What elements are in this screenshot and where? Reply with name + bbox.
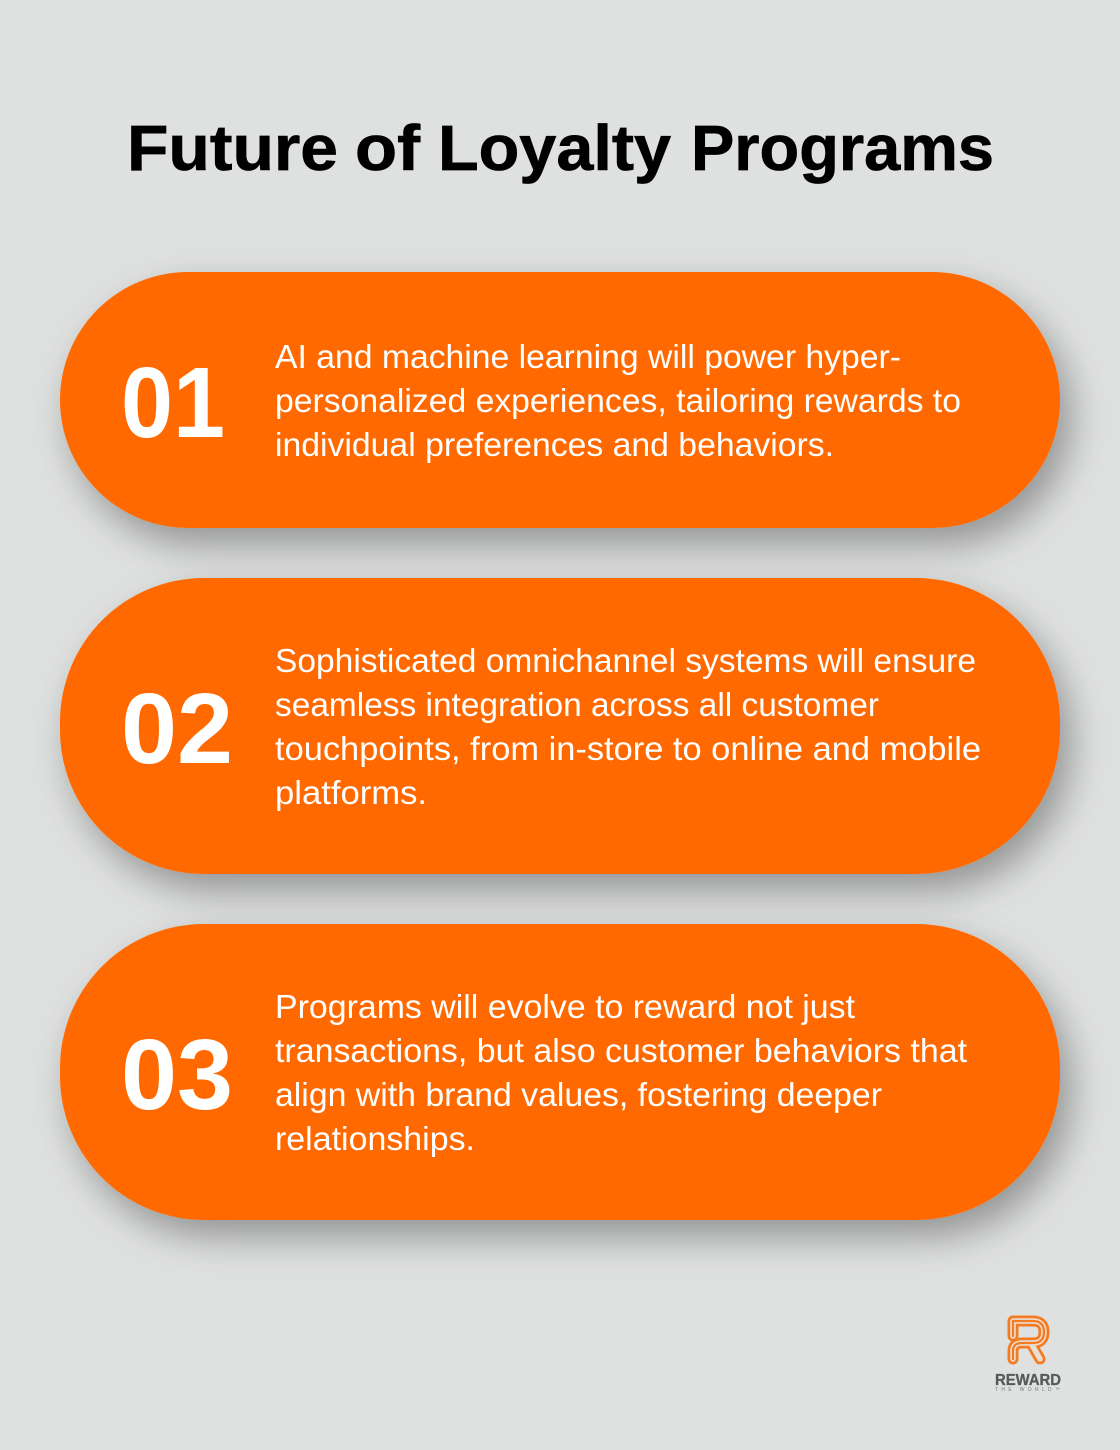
description 03: relationships. [275,1120,475,1157]
pill background 01 [60,272,1060,528]
pill background 03 [60,924,1060,1220]
description 02: touchpoints, from in-store to online and mobile [275,730,981,767]
logo wordmark: REWARD [995,1372,1061,1389]
description 02 [275,642,981,811]
icon: R mark [1013,1321,1044,1359]
description 03: align with brand values, fostering deeper [275,1076,882,1113]
description 03: transactions, but also customer behaviors that [275,1032,967,1069]
panel: item 02 [60,578,1060,874]
description 02: platforms. [275,774,427,811]
description 01: personalized experiences, tailoring rewards to [275,382,961,419]
description 03: Programs will evolve to reward not just [275,988,855,1025]
description 02: seamless integration across all customer [275,686,879,723]
description 02: Sophisticated omnichannel systems will ensure [275,642,976,679]
number 02: 02 [121,673,233,785]
description 01 [275,338,961,463]
title: Future [127,112,338,184]
logo tagline: THE WORLD™ [995,1387,1060,1393]
description 03 [275,988,967,1157]
title: Loyalty [438,112,671,184]
description 01: AI and machine learning will power hyper- [275,338,901,375]
pill background 02 [60,578,1060,874]
number 03: 03 [121,1019,233,1131]
title: Programs [691,112,994,184]
panel: item 03 [60,924,1060,1220]
panel: item 01 [60,272,1060,528]
number 01: 01 [121,347,225,459]
title: of [355,112,421,184]
description 01: individual preferences and behaviors. [275,426,834,463]
title [127,112,994,184]
logo: Reward the World [995,1321,1061,1393]
